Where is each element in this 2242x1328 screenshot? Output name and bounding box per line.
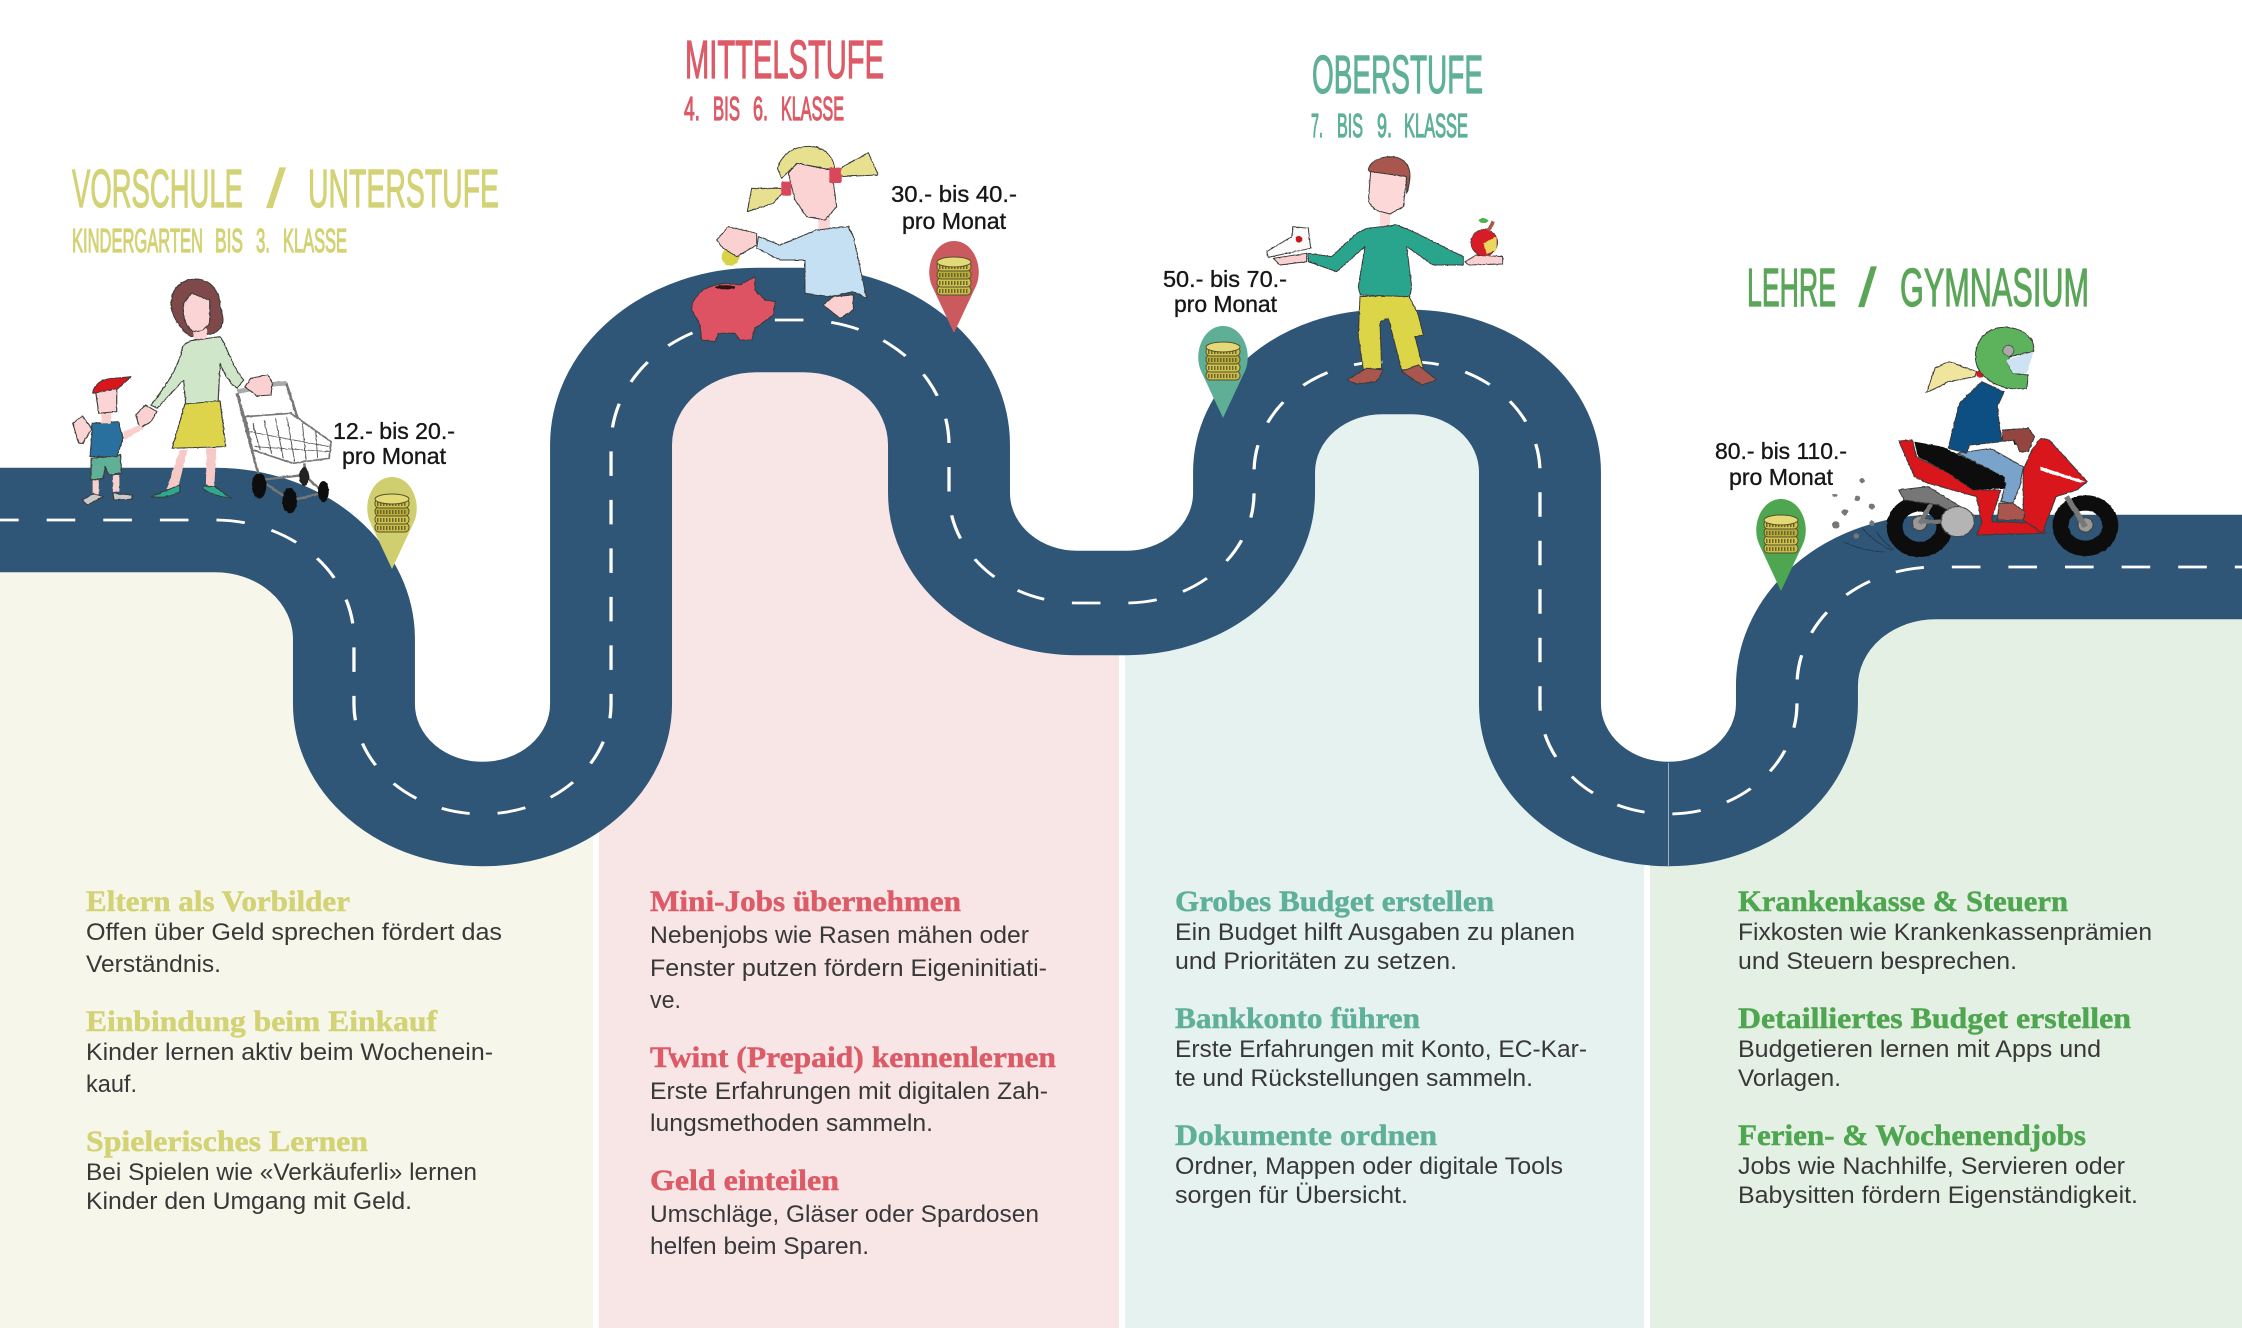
title: Vorschule / Unterstufe: / bbox=[267, 159, 285, 219]
tip: Geld einteilen: helfen beim Sparen. bbox=[650, 1233, 869, 1260]
title: Lehre / Gymnasium: LEHRE bbox=[1747, 258, 1836, 318]
piggy bank bbox=[692, 277, 775, 342]
tip: Krankenkasse & Steuern: Fixkosten wie Krankenkassenprämien bbox=[1738, 919, 2152, 946]
price label 2: 30.- bis 40.- bbox=[891, 181, 1017, 207]
rider legs bbox=[1958, 448, 2023, 503]
title: Mittelstufe: 4. bbox=[684, 90, 700, 127]
price label 1: 12.- bis 20.- bbox=[333, 418, 455, 444]
title: Vorschule / Unterstufe bbox=[72, 159, 499, 259]
tip: Eltern als Vorbilder: Eltern als Vorbilder bbox=[86, 885, 350, 918]
tip: Krankenkasse & Steuern: Krankenkasse & Steuern bbox=[1738, 885, 2068, 918]
title: Vorschule / Unterstufe: BIS bbox=[215, 222, 243, 259]
title: Vorschule / Unterstufe: 3. bbox=[256, 222, 270, 259]
title: Vorschule / Unterstufe: KLASSE bbox=[283, 222, 347, 259]
tip: Bankkonto führen: Erste Erfahrungen mit Konto, EC-Kar- bbox=[1175, 1036, 1587, 1063]
title: Mittelstufe: 6. bbox=[753, 90, 768, 127]
price label 3 bbox=[1163, 266, 1287, 317]
tip: Mini-Jobs übernehmen: Nebenjobs wie Rasen mähen oder bbox=[650, 922, 1029, 949]
price label 4 bbox=[1715, 438, 1847, 490]
title: Vorschule / Unterstufe: UNTERSTUFE bbox=[308, 159, 499, 219]
price label 4: 80.- bis 110.- bbox=[1715, 438, 1847, 464]
tip: Detailliertes Budget erstellen bbox=[1738, 1002, 2131, 1092]
tip: Mini-Jobs übernehmen: ve. bbox=[650, 987, 681, 1014]
tip: Bankkonto führen: te und Rückstellungen sammeln. bbox=[1175, 1065, 1533, 1092]
fender and engine bbox=[1899, 487, 1977, 523]
tip: Bankkonto führen: Bankkonto führen bbox=[1175, 1002, 1420, 1035]
tip: Twint (Prepaid) kennenlernen: Erste Erfahrungen mit digitalen Zah- bbox=[650, 1078, 1048, 1105]
tip: Dokumente ordnen: sorgen für Übersicht. bbox=[1175, 1182, 1408, 1209]
panel: Oberstufe text bbox=[1175, 885, 1587, 1209]
tip: Detailliertes Budget erstellen: Budgetieren lernen mit Apps und bbox=[1738, 1036, 2101, 1063]
icon: yellow pin with coins bbox=[367, 477, 417, 569]
sneaker bbox=[1267, 227, 1311, 257]
illustration: mother with child and shopping cart bbox=[73, 279, 331, 513]
panel backgrounds bbox=[0, 372, 2242, 1328]
tip: Twint (Prepaid) kennenlernen: Twint (Prepaid) kennenlernen bbox=[650, 1041, 1056, 1074]
tip: Spielerisches Lernen: Kinder den Umgang mit Geld. bbox=[86, 1188, 412, 1215]
speed lines bbox=[1843, 528, 1894, 552]
tip: Eltern als Vorbilder: Offen über Geld sprechen fördert das bbox=[86, 919, 502, 946]
title: Oberstufe: BIS bbox=[1337, 107, 1363, 144]
price label 1 bbox=[333, 418, 455, 469]
title: Mittelstufe: BIS bbox=[713, 90, 740, 127]
tip: Einbindung beim Einkauf: Einbindung beim Einkauf bbox=[86, 1005, 438, 1038]
title: Oberstufe: KLASSE bbox=[1404, 107, 1468, 144]
icon: teal pin with coins bbox=[1198, 326, 1248, 418]
icon: green pin with coins bbox=[1756, 499, 1806, 591]
illustration: boy with sneaker and apple bbox=[1267, 157, 1503, 385]
tip: Grobes Budget erstellen: und Prioritäten zu setzen. bbox=[1175, 948, 1457, 975]
tip: Spielerisches Lernen bbox=[86, 1125, 477, 1215]
tip: Eltern als Vorbilder bbox=[86, 885, 502, 978]
tip: Grobes Budget erstellen: Ein Budget hilft Ausgaben zu planen bbox=[1175, 919, 1575, 946]
title: Oberstufe bbox=[1311, 45, 1483, 144]
title: Oberstufe: 7. bbox=[1311, 107, 1323, 144]
title: Mittelstufe: KLASSE bbox=[781, 90, 844, 127]
road bbox=[0, 320, 2242, 814]
tip: Krankenkasse & Steuern: und Steuern besprechen. bbox=[1738, 948, 2017, 975]
title: Oberstufe: 9. bbox=[1377, 107, 1392, 144]
title: Mittelstufe: MITTELSTUFE bbox=[685, 30, 884, 90]
tip: Einbindung beim Einkauf: Kinder lernen aktiv beim Wochenein- bbox=[86, 1039, 493, 1066]
price label 2: pro Monat bbox=[902, 208, 1007, 234]
tip: Einbindung beim Einkauf: kauf. bbox=[86, 1071, 137, 1098]
helmet bbox=[1975, 327, 2034, 389]
tip: Detailliertes Budget erstellen: Vorlagen. bbox=[1738, 1065, 1841, 1092]
tip: Einbindung beim Einkauf bbox=[86, 1005, 493, 1098]
tip: Twint (Prepaid) kennenlernen bbox=[650, 1041, 1056, 1137]
tip: Spielerisches Lernen: Bei Spielen wie «Verkäuferli» lernen bbox=[86, 1159, 477, 1186]
debris bbox=[1832, 478, 1875, 539]
title: Lehre / Gymnasium: GYMNASIUM bbox=[1900, 258, 2089, 318]
price label 3: pro Monat bbox=[1174, 291, 1278, 317]
scooter body bbox=[1899, 440, 2046, 535]
tip: Ferien- & Wochenendjobs: Jobs wie Nachhilfe, Servieren oder bbox=[1738, 1153, 2125, 1180]
panel: Vorschule text bbox=[86, 885, 502, 1215]
price label 3: 50.- bis 70.- bbox=[1163, 266, 1287, 292]
tip: Dokumente ordnen: Ordner, Mappen oder digitale Tools bbox=[1175, 1153, 1563, 1180]
icon: red pin with coins bbox=[929, 241, 979, 333]
tip: Grobes Budget erstellen: Grobes Budget erstellen bbox=[1175, 885, 1494, 918]
illustration: rider on red scooter bbox=[1832, 327, 2110, 552]
title: Lehre / Gymnasium bbox=[1747, 258, 2089, 318]
tip: Ferien- & Wochenendjobs bbox=[1738, 1119, 2138, 1209]
tip: Mini-Jobs übernehmen: Mini-Jobs übernehmen bbox=[650, 885, 961, 918]
title: Lehre / Gymnasium: / bbox=[1859, 258, 1876, 318]
tip: Geld einteilen: Geld einteilen bbox=[650, 1164, 839, 1197]
tip: Ferien- & Wochenendjobs: Ferien- & Wochenendjobs bbox=[1738, 1119, 2086, 1152]
price label 2 bbox=[891, 181, 1017, 234]
tip: Spielerisches Lernen: Spielerisches Lernen bbox=[86, 1125, 368, 1158]
tip: Mini-Jobs übernehmen bbox=[650, 885, 1047, 1014]
price label 4: pro Monat bbox=[1729, 464, 1834, 490]
jacket bbox=[1948, 382, 2004, 453]
tip: Krankenkasse & Steuern bbox=[1738, 885, 2152, 975]
cart bbox=[237, 383, 331, 501]
tip: Dokumente ordnen bbox=[1175, 1119, 1563, 1209]
tip: Detailliertes Budget erstellen: Detailliertes Budget erstellen bbox=[1738, 1002, 2131, 1035]
boy bbox=[93, 425, 144, 495]
price label 1: pro Monat bbox=[342, 443, 447, 469]
tip: Ferien- & Wochenendjobs: Babysitten fördern Eigenständigkeit. bbox=[1738, 1182, 2138, 1209]
apple bbox=[1471, 229, 1498, 256]
illustration: girl with piggy bank bbox=[692, 146, 878, 342]
tip: Eltern als Vorbilder: Verständnis. bbox=[86, 951, 221, 978]
title: Oberstufe: OBERSTUFE bbox=[1312, 45, 1483, 105]
panel: Mittelstufe text bbox=[650, 885, 1056, 1260]
ponytail bbox=[1926, 362, 1977, 393]
woman bbox=[171, 279, 223, 337]
title: Vorschule / Unterstufe: KINDERGARTEN bbox=[72, 222, 203, 259]
pigtails bbox=[747, 153, 878, 212]
tip: Dokumente ordnen: Dokumente ordnen bbox=[1175, 1119, 1437, 1152]
title: Vorschule / Unterstufe: VORSCHULE bbox=[72, 159, 243, 219]
tip: Geld einteilen bbox=[650, 1164, 1039, 1260]
tip: Twint (Prepaid) kennenlernen: lungsmethoden sammeln. bbox=[650, 1110, 933, 1137]
tip: Grobes Budget erstellen bbox=[1175, 885, 1575, 975]
title: Mittelstufe bbox=[684, 30, 884, 127]
panel: Lehre / Gymnasium text bbox=[1738, 885, 2152, 1209]
sweater bbox=[757, 227, 867, 298]
tip: Bankkonto führen bbox=[1175, 1002, 1587, 1092]
wheels bbox=[1895, 504, 1944, 549]
tip: Mini-Jobs übernehmen: Fenster putzen fördern Eigeninitiati- bbox=[650, 955, 1047, 982]
tip: Geld einteilen: Umschläge, Gläser oder Spardosen bbox=[650, 1201, 1039, 1228]
